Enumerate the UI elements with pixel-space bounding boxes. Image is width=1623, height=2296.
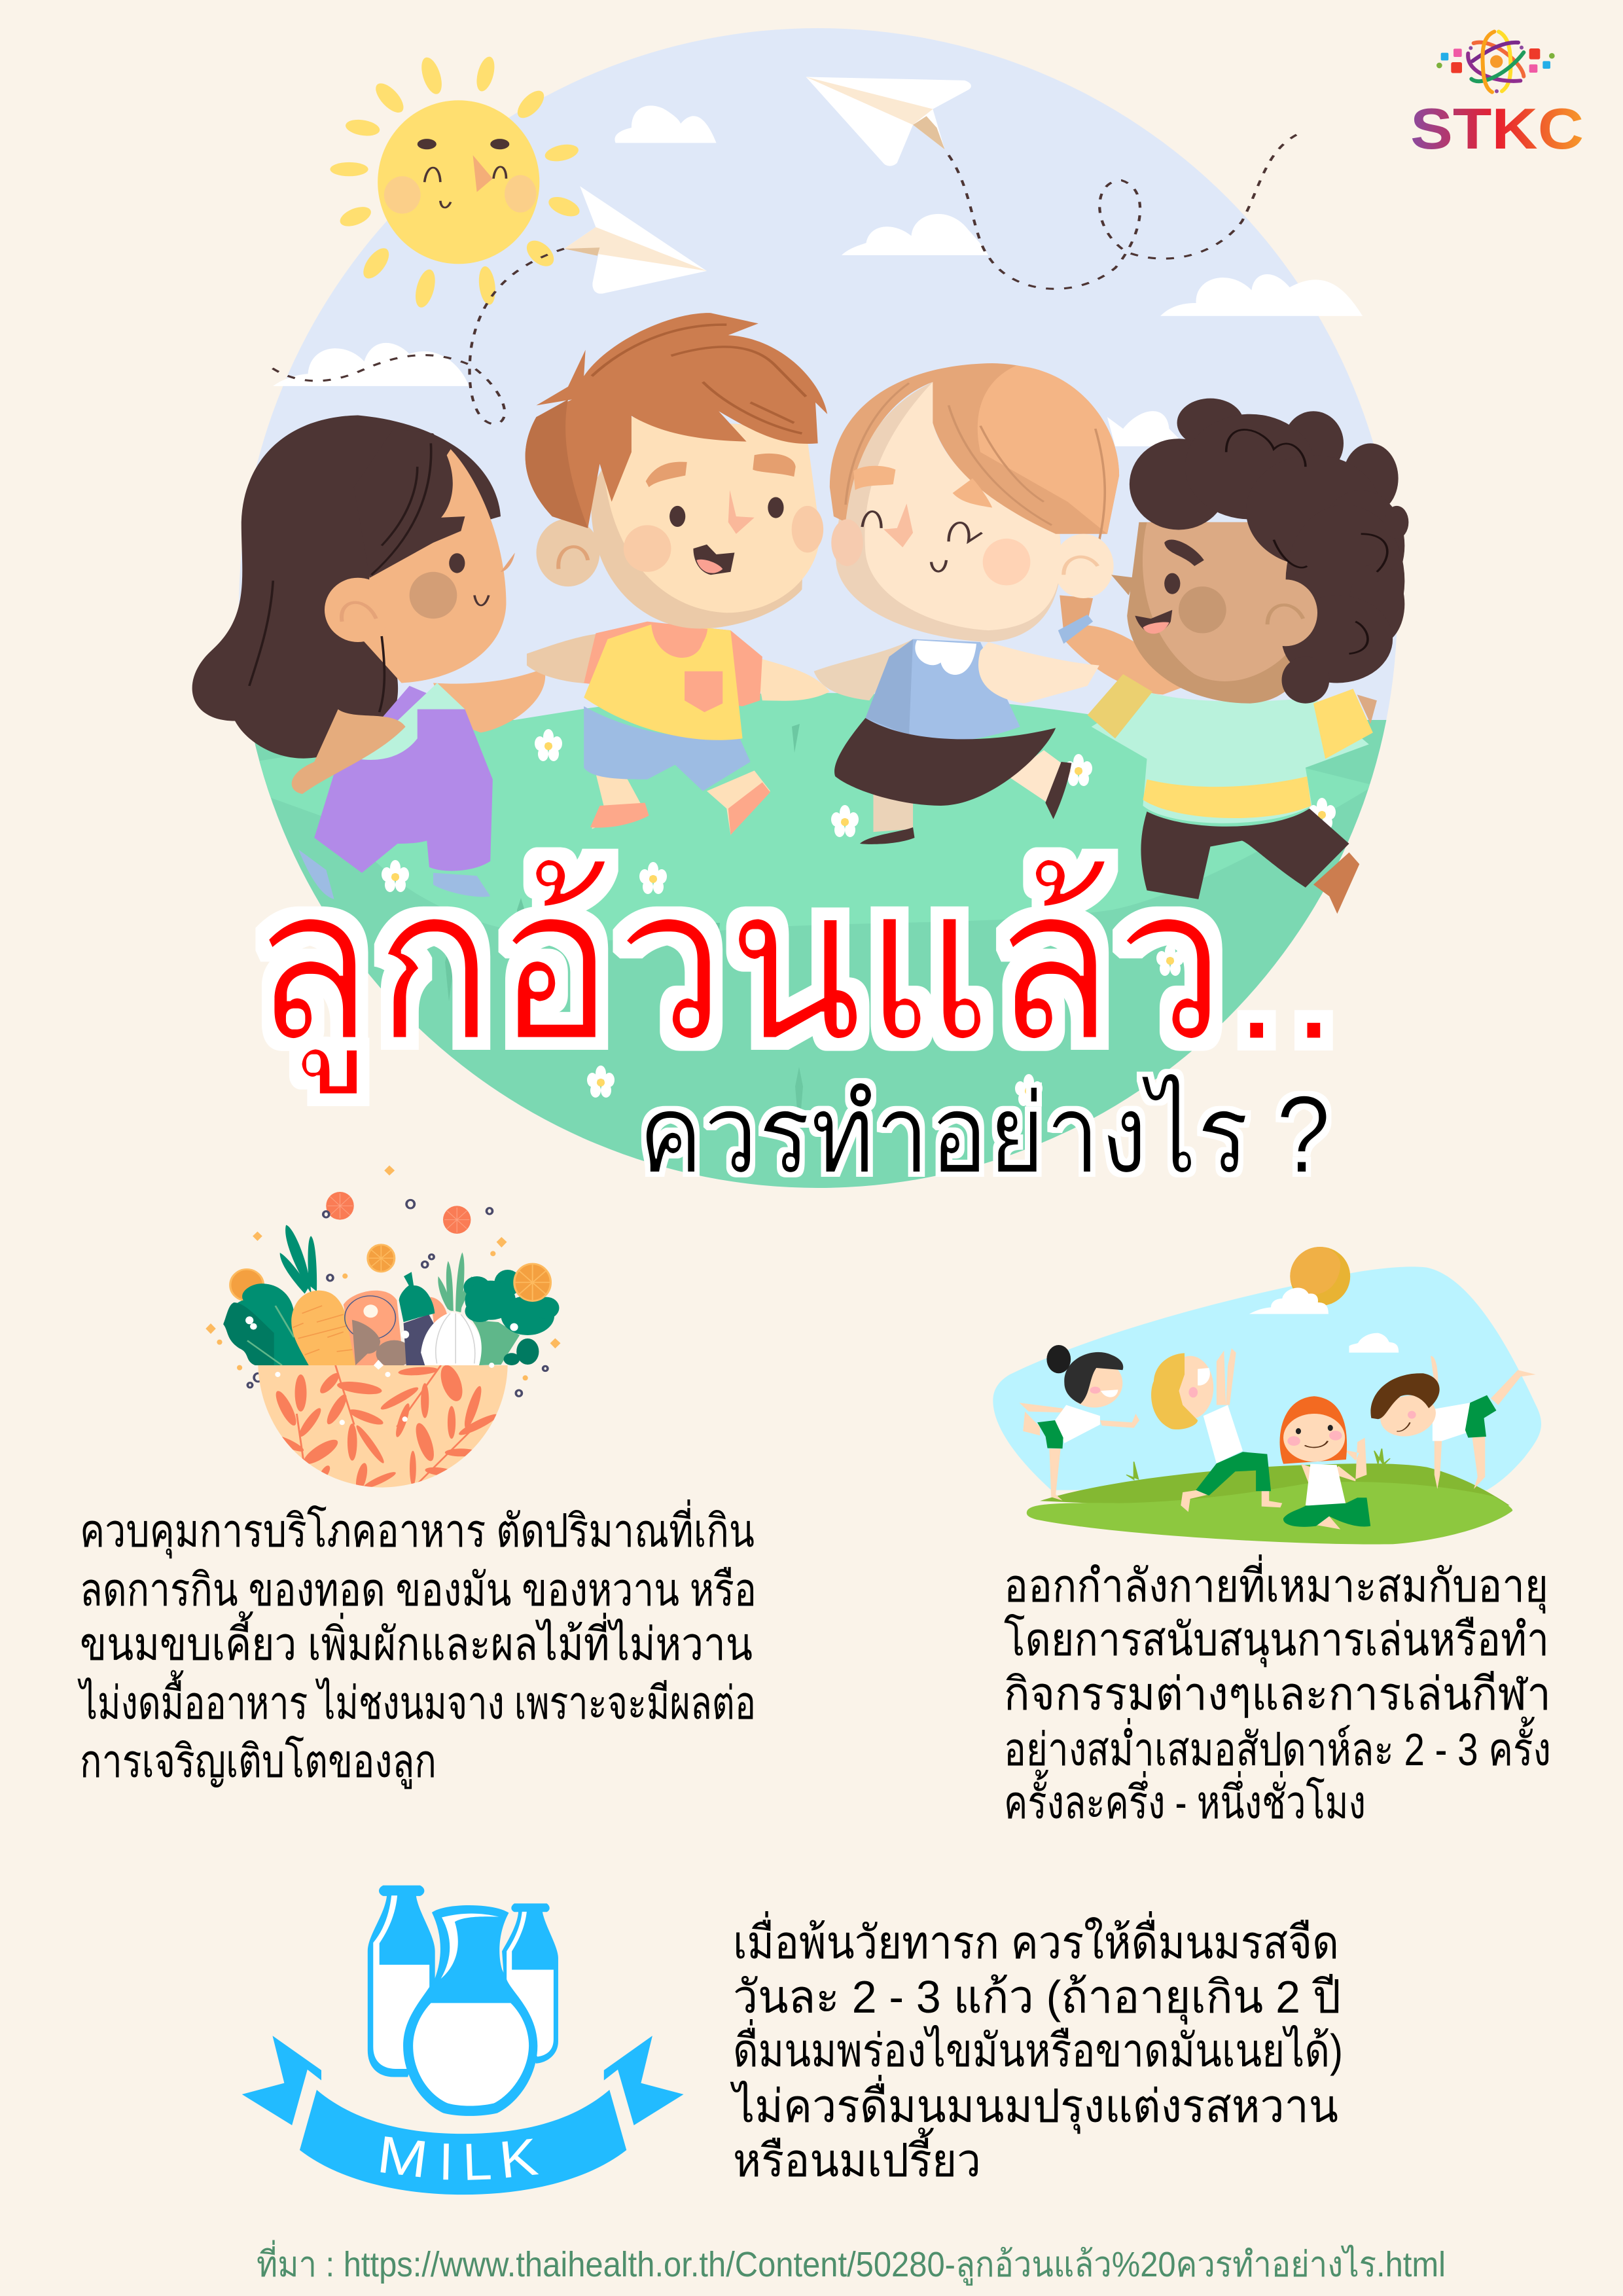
dashed flight paths <box>267 132 1302 424</box>
milk text: หรือนมเปรี้ยว <box>733 2127 981 2186</box>
icon: vegetable bowl <box>205 1166 561 1492</box>
milk label <box>374 2125 541 2191</box>
child two <box>1151 1348 1282 1512</box>
left bottle <box>368 1886 435 2077</box>
exercise text <box>1004 1554 1551 1828</box>
exercise text: ออกกำลังกายที่เหมาะสมกับอายุ <box>1004 1554 1548 1614</box>
main title: ลูกอ้วนแล้ว <box>251 843 1226 1096</box>
hero scene <box>192 28 1440 1217</box>
main title: .. <box>1233 886 1347 1076</box>
illustration: children doing yoga <box>993 1247 1541 1545</box>
logo emblem <box>1468 31 1524 92</box>
panel: milk <box>242 1886 1343 2195</box>
exercise text: กิจกรรมต่างๆและการเล่นกีฬา <box>1004 1668 1551 1719</box>
milk label: M <box>374 2125 431 2189</box>
right bottle <box>502 1903 558 2064</box>
milk jug <box>403 1905 537 2116</box>
icon: milk bottles and ribbon <box>242 1886 684 2195</box>
milk text: วันละ 2 - 3 แก้ว (ถ้าอายุเกิน 2 ปี <box>733 1971 1341 2025</box>
child four <box>1370 1356 1536 1489</box>
logo wordmark: STKC <box>1410 96 1584 161</box>
food text: การเจริญเติบโตของลูก <box>80 1735 437 1789</box>
flowers <box>382 729 1336 1106</box>
milk text <box>730 1911 1343 2186</box>
paper plane right <box>806 77 971 166</box>
clouds <box>273 105 1363 446</box>
ribbon <box>242 2036 684 2195</box>
food text <box>77 1499 757 1789</box>
child one <box>1019 1345 1139 1501</box>
exercise text: ครั้งละครึ่ง - หนึ่งชั่วโมง <box>1004 1769 1366 1828</box>
milk label: K <box>496 2127 541 2189</box>
ground <box>255 692 1386 1188</box>
paper plane left <box>564 186 707 294</box>
milk label: L <box>461 2132 493 2191</box>
logo <box>1410 31 1584 161</box>
sky circle <box>239 28 1397 1188</box>
food text: ควบคุมการบริโภคอาหาร ตัดปริมาณที่เกิน <box>80 1499 755 1559</box>
food text: ไม่งดมื้ออาหาร ไม่ชงนมจาง เพราะจะมีผลต่อ <box>77 1670 756 1729</box>
girl with blonde hair <box>814 363 1186 844</box>
grass tufts <box>445 724 803 1132</box>
milk text: เมื่อพ้นวัยทารก ควรให้ดื่มนมรสจืด <box>733 1911 1339 1968</box>
source line: ที่มา : https://www.thaihealth.or.th/Content/50280-ลูกอ้วนแล้ว%20ควรทำอย่างไร.html <box>257 2240 1446 2286</box>
milk text: ไม่ควรดื่มนมนมปรุงแต่งรสหวาน <box>730 2075 1338 2134</box>
boy with curly hair <box>1088 399 1408 914</box>
sun <box>330 56 584 308</box>
exercise text: โดยการสนับสนุนการเล่นหรือทำ <box>1004 1613 1549 1668</box>
milk label: I <box>438 2132 454 2191</box>
panel: exercise <box>993 1247 1551 1828</box>
food text: ลดการกิน ของทอด ของมัน ของหวาน หรือ <box>80 1564 757 1615</box>
girl with dark hair <box>192 415 545 899</box>
food text: ขนมขบเคี้ยว เพิ่มผักและผลไม้ที่ไม่หวาน <box>80 1611 753 1670</box>
milk text: ดื่มนมพร่องไขมันหรือขาดมันเนยได้) <box>733 2019 1343 2076</box>
child three <box>1280 1396 1370 1530</box>
boy with brown hair <box>526 313 830 835</box>
panel: food <box>77 1166 757 1789</box>
subtitle: ควรทำอย่างไร ? <box>638 1073 1330 1196</box>
